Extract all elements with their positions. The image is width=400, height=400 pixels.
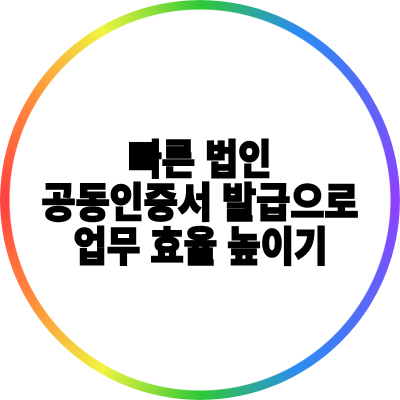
title line 1: 빠른 법인 — [128, 137, 272, 183]
title line 3: 업무 효율 높이기 — [74, 224, 328, 270]
title line 2: 공동인증서 발급으로 — [42, 180, 358, 226]
